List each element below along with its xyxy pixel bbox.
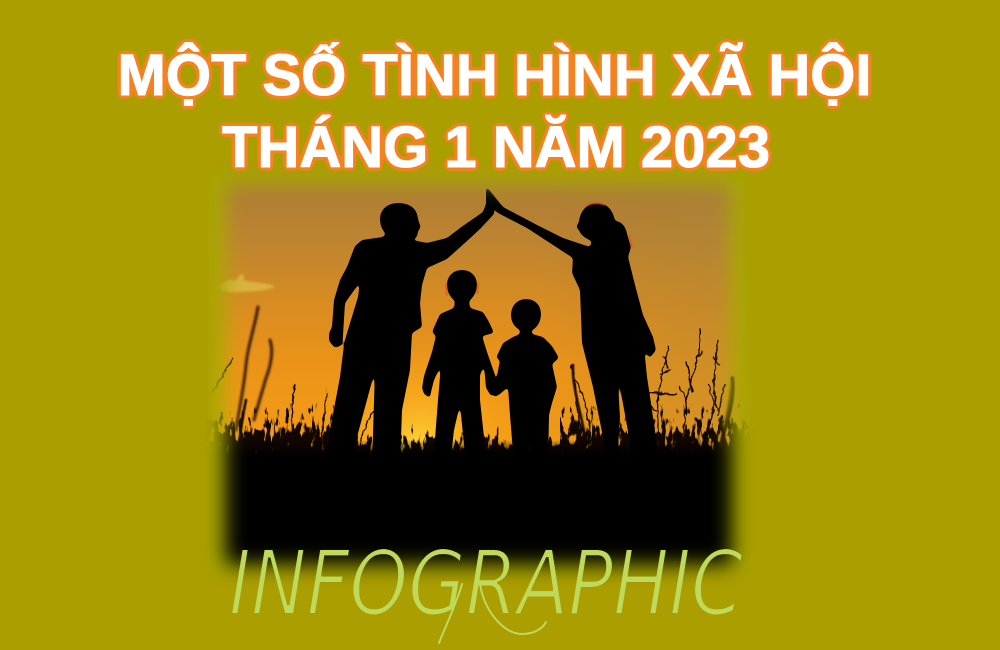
- title: MỘT SỐ TÌNH HÌNH XÃ HỘI: [118, 43, 872, 108]
- photo: family silhouette at sunset: [209, 174, 748, 582]
- mother: [486, 186, 659, 465]
- father: [326, 186, 495, 465]
- infographic canvas: [117, 38, 872, 644]
- heavy stems: [238, 365, 733, 455]
- ground: [208, 440, 748, 582]
- sky: [214, 174, 742, 453]
- blurred foreground stems: [236, 307, 733, 440]
- rim light on hair: [446, 203, 632, 296]
- cloud: [218, 274, 275, 292]
- girl: [422, 270, 499, 465]
- grass mass: [208, 388, 748, 456]
- title: THÁNG 1 NĂM 2023: [222, 115, 770, 180]
- grass stems: [212, 328, 725, 455]
- boy: [493, 299, 558, 452]
- infographic label: INFOGRAPHIC: [229, 531, 743, 635]
- title: [118, 43, 872, 180]
